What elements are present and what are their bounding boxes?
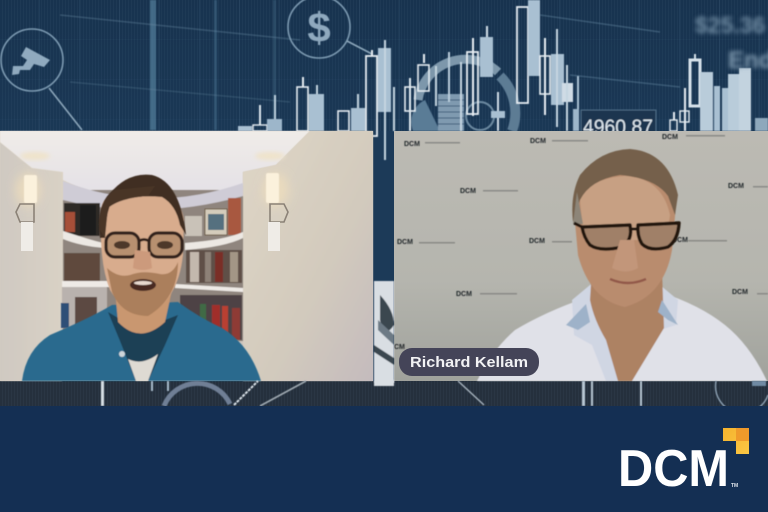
right wall xyxy=(243,131,373,381)
backdrop logos: DCM xyxy=(662,134,678,141)
hair xyxy=(572,149,678,222)
name tag: Richard Kellam: Richard Kellam xyxy=(410,354,528,371)
person: Richard Kellam xyxy=(477,149,767,381)
panel: left video, host in front of bookcase xyxy=(0,131,373,381)
footer bar xyxy=(0,406,768,512)
person: host xyxy=(22,175,261,381)
nose xyxy=(612,240,638,272)
backdrop logos: CM xyxy=(394,344,405,351)
logo: DCM: TM xyxy=(731,483,738,489)
face xyxy=(573,172,676,307)
icon: dollar sign in circle: $ xyxy=(307,4,331,51)
backdrop logos: DCM xyxy=(456,291,472,298)
gauge ring behind candles xyxy=(411,59,515,131)
shirt xyxy=(22,302,261,381)
backdrop logos xyxy=(394,134,768,351)
logo mark: orange corner square xyxy=(723,428,749,454)
backdrop logos: DCM xyxy=(404,141,420,148)
lower strip chart fragments xyxy=(101,381,768,413)
backdrop logos: DCM xyxy=(529,238,545,245)
bookcase xyxy=(61,181,243,341)
icon: security camera in circle xyxy=(1,29,82,130)
logo: DCM: DCM xyxy=(618,440,729,498)
name tag: Richard Kellam xyxy=(399,348,539,376)
circular graphic between panels xyxy=(374,281,394,386)
blurred ticker text, top right xyxy=(695,12,768,74)
hair xyxy=(99,175,186,238)
backdrop logos: DCM xyxy=(460,188,476,195)
shirt xyxy=(477,292,767,381)
backdrop logos: DCM xyxy=(397,239,413,246)
mouth xyxy=(610,279,646,283)
face xyxy=(101,188,184,315)
beard xyxy=(107,262,178,316)
glasses xyxy=(106,233,139,257)
backdrop logos: DCM xyxy=(732,289,748,296)
room walls xyxy=(0,131,373,381)
glasses xyxy=(574,223,679,249)
backdrop logos: DCM xyxy=(728,183,744,190)
backdrop logos: DCM xyxy=(530,138,546,145)
ceiling xyxy=(0,131,310,202)
wall lights xyxy=(15,152,289,251)
blurred ticker text, top right: $25.36 xyxy=(695,12,765,38)
panel: right video, Richard Kellam on DCM backdrop xyxy=(394,131,768,381)
neck and chest xyxy=(590,268,664,381)
icon: dollar sign in circle xyxy=(288,0,372,58)
candlestick chart xyxy=(238,0,768,160)
neck xyxy=(115,290,172,334)
left wall xyxy=(0,142,62,381)
backdrop logos: DCM xyxy=(672,237,688,244)
dark blue chart background xyxy=(0,0,768,406)
price readout: 4960.87: 4960.87 xyxy=(583,116,653,139)
